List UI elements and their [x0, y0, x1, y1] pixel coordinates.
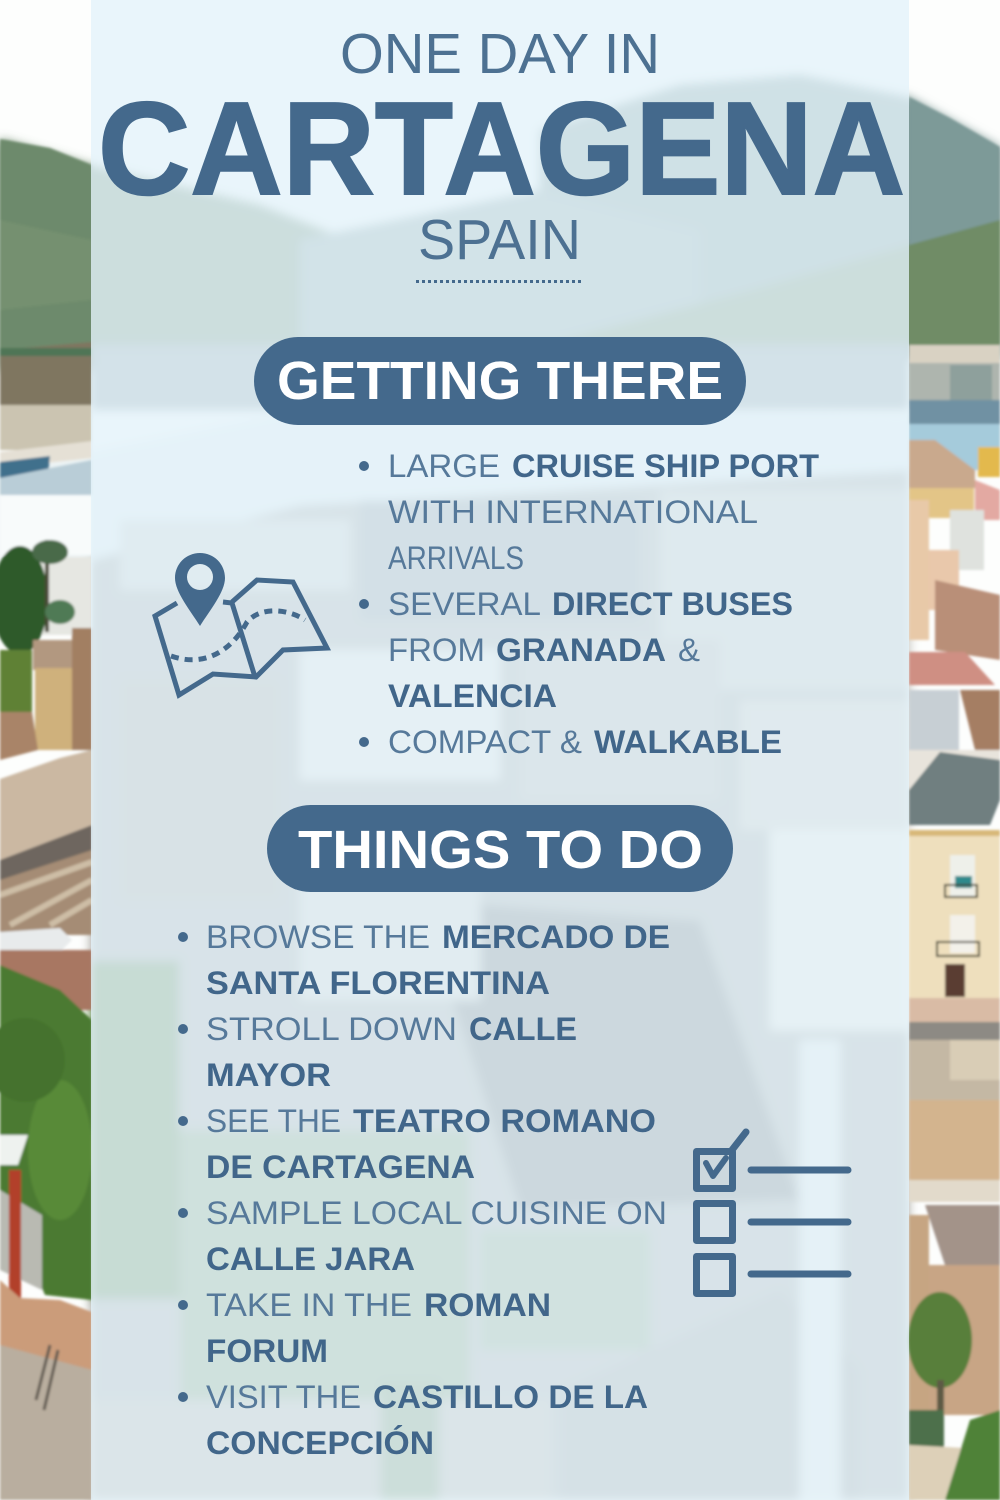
list: things to do: CASTILLO DE LA — [373, 1379, 648, 1415]
list: getting there: GRANADA — [496, 632, 666, 668]
list: things to do: SAMPLE LOCAL CUISINE ON — [206, 1195, 667, 1231]
left strip — [0, 139, 92, 350]
title: SPAIN — [418, 208, 581, 272]
list: things to do: SANTA FLORENTINA — [206, 965, 550, 1001]
list: getting there: WITH INTERNATIONAL — [388, 494, 758, 530]
port and water — [91, 345, 909, 410]
list: getting there: CRUISE SHIP PORT — [512, 448, 819, 484]
list: getting there: FROM — [388, 632, 485, 668]
icon: checklist — [696, 1132, 848, 1294]
section heading: getting there — [254, 337, 746, 425]
title — [98, 22, 905, 272]
list: things to do: MAYOR — [206, 1057, 331, 1093]
list: things to do: BROWSE THE — [206, 919, 430, 955]
list: getting there: WALKABLE — [594, 724, 782, 760]
list: getting there — [359, 448, 819, 760]
list: things to do: ROMAN — [424, 1287, 551, 1323]
list: things to do: TAKE IN THE — [206, 1287, 412, 1323]
list: things to do: SEE THE — [206, 1103, 341, 1139]
list: getting there: & — [678, 632, 700, 668]
list: getting there: DIRECT BUSES — [552, 586, 793, 622]
title: ONE DAY IN — [340, 22, 660, 86]
list: getting there: COMPACT & — [388, 724, 582, 760]
list: things to do: CALLE — [469, 1011, 577, 1047]
section heading: things to do — [267, 805, 733, 892]
dotted divider — [416, 280, 581, 283]
list: getting there: VALENCIA — [388, 678, 557, 714]
far mountains — [540, 75, 1000, 360]
city mass — [90, 470, 909, 1500]
list: getting there: LARGE — [388, 448, 500, 484]
list: things to do: CONCEPCIÓN — [206, 1425, 434, 1461]
list: things to do: CALLE JARA — [206, 1241, 415, 1277]
list: things to do: FORUM — [206, 1333, 328, 1369]
section heading: things to do: THINGS TO DO — [298, 820, 703, 880]
list: things to do: VISIT THE — [206, 1379, 361, 1415]
list: things to do: STROLL DOWN — [206, 1011, 457, 1047]
list: getting there: SEVERAL — [388, 586, 541, 622]
icon: map with pin — [155, 553, 327, 695]
list: getting there: ARRIVALS — [388, 540, 524, 576]
section heading: getting there: GETTING THERE — [277, 351, 723, 411]
list: things to do — [178, 919, 670, 1461]
list: things to do: DE CARTAGENA — [206, 1149, 475, 1185]
list: things to do: MERCADO DE — [442, 919, 670, 955]
right strip — [909, 97, 1000, 250]
list: things to do: TEATRO ROMANO — [353, 1103, 656, 1139]
title: CARTAGENA — [98, 75, 905, 222]
